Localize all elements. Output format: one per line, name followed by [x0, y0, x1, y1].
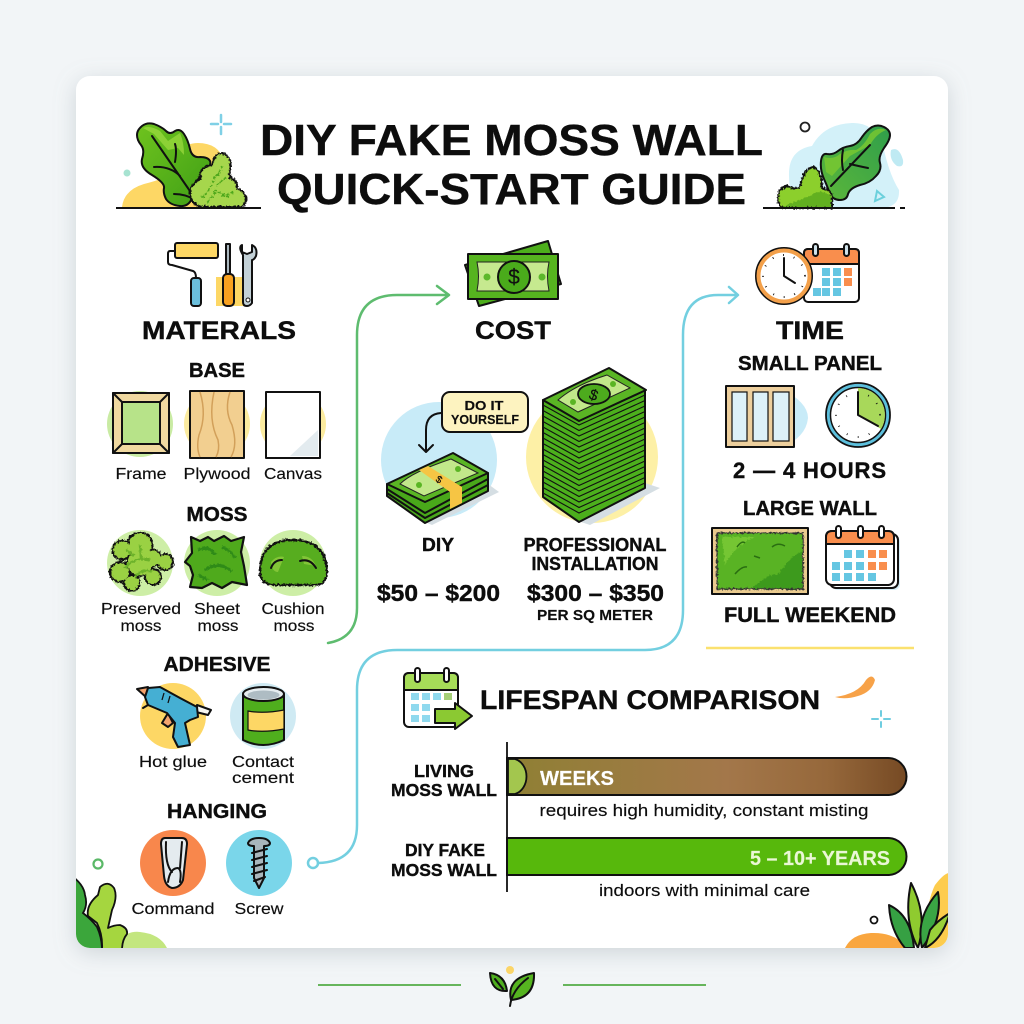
heading: time: TIME — [776, 317, 844, 345]
icon: diy money stack: $ — [434, 474, 444, 487]
subheading: hanging: HANGING — [167, 801, 267, 823]
icon: banknotes: $ — [508, 266, 520, 289]
bar: diy fake moss wall — [507, 838, 906, 875]
label: preserved moss: moss — [120, 618, 162, 635]
label: professional installation: INSTALLATION — [532, 554, 658, 574]
icon: title leaf and moss left — [116, 115, 261, 208]
label: screw: Screw — [234, 901, 284, 918]
icon: title leaf and moss right — [763, 122, 905, 208]
title: DIY FAKE MOSS WALL — [260, 116, 763, 165]
subheading: large wall: LARGE WALL — [743, 498, 877, 520]
label: diy fake moss wall — [391, 840, 497, 880]
label: cushion moss: Cushion — [262, 601, 324, 618]
infographic canvas — [68, 73, 956, 1007]
callout: do it yourself — [419, 392, 528, 452]
note: living moss care: requires high humidity, constant misting — [540, 801, 868, 820]
label: contact cement: Contact — [232, 754, 295, 771]
icon: frame — [107, 391, 173, 457]
icon: clock two to four hours — [826, 383, 890, 447]
label: professional installation — [524, 535, 667, 574]
subheading: adhesive: ADHESIVE — [164, 654, 270, 676]
label: contact cement: cement — [232, 770, 295, 787]
icon: hot glue gun — [137, 683, 211, 749]
panel: time — [706, 244, 914, 648]
subheading: moss: MOSS — [186, 504, 248, 526]
icon: professional money stack: $ — [587, 386, 601, 405]
label: cushion moss — [262, 601, 324, 635]
bar: living moss wall: WEEKS — [540, 768, 614, 790]
heading: cost: COST — [475, 317, 551, 345]
icon: contact cement can — [230, 683, 296, 749]
label: preserved moss: Preserved — [101, 601, 181, 618]
subheading: small panel: SMALL PANEL — [738, 353, 882, 375]
callout: do it yourself: YOURSELF — [451, 412, 519, 427]
value: diy cost: $50 – $200 — [377, 580, 500, 606]
icon: screw — [226, 830, 292, 896]
label: sheet moss — [194, 601, 241, 635]
icon: plywood — [184, 391, 250, 458]
label: living moss wall — [391, 761, 497, 800]
heading: materials: MATERALS — [142, 317, 296, 345]
value: professional cost — [527, 580, 664, 624]
label: frame: Frame — [116, 466, 167, 483]
label: plywood: Plywood — [184, 466, 250, 483]
subheading: base: BASE — [189, 360, 245, 382]
label: canvas: Canvas — [264, 466, 322, 483]
icon: preserved moss — [107, 530, 174, 596]
icon: banknotes — [465, 241, 561, 306]
decoration: bottom left foliage — [72, 860, 167, 950]
arrow: materials to cost — [328, 286, 449, 643]
value: professional cost: PER SQ METER — [537, 607, 653, 624]
axis — [506, 742, 508, 892]
icon: diy money stack — [381, 402, 499, 525]
value: professional cost: $300 – $350 — [527, 580, 664, 606]
icon: large calendar — [826, 526, 900, 590]
icon: cushion moss — [260, 530, 327, 596]
label: living moss wall: LIVING — [414, 761, 474, 781]
icon: clock and calendar — [756, 244, 859, 304]
arrow: hanging to time — [308, 287, 738, 868]
label: sheet moss: moss — [198, 618, 238, 635]
label: sheet moss: Sheet — [194, 601, 241, 618]
decoration: bottom right foliage — [845, 873, 950, 948]
value: small panel time: 2 — 4 HOURS — [733, 458, 886, 483]
label: diy: DIY — [422, 535, 454, 555]
footer divider with leaf — [318, 966, 706, 1006]
icon: tools — [168, 243, 256, 306]
label: living moss wall: MOSS WALL — [391, 780, 497, 800]
icon: sheet moss — [184, 530, 250, 596]
panel: materials — [101, 243, 327, 918]
label: hot glue: Hot glue — [139, 754, 207, 771]
label: cushion moss: moss — [274, 618, 314, 635]
label: professional installation: PROFESSIONAL — [524, 535, 667, 555]
icon: canvas — [260, 391, 326, 458]
label: diy fake moss wall: DIY FAKE — [405, 840, 485, 860]
label: command: Command — [132, 901, 214, 918]
callout: do it yourself: DO IT — [464, 398, 504, 413]
panel: cost — [377, 241, 667, 624]
icon: professional money stack — [526, 368, 660, 525]
icon: calendar with arrow — [404, 668, 472, 729]
title — [260, 116, 763, 214]
panel: lifespan comparison — [391, 668, 906, 900]
label: contact cement — [232, 754, 295, 787]
icon: large moss wall — [712, 528, 808, 594]
icon: small wood frame — [726, 386, 808, 448]
bar: living moss wall — [507, 758, 906, 795]
title: QUICK-START GUIDE — [277, 165, 746, 214]
value: large wall time: FULL WEEKEND — [724, 604, 896, 627]
white card — [76, 76, 948, 948]
label: diy fake moss wall: MOSS WALL — [391, 860, 497, 880]
bar: diy fake moss wall: 5 – 10+ YEARS — [750, 848, 890, 870]
note: diy moss care: indoors with minimal care — [599, 881, 810, 900]
label: preserved moss — [101, 601, 181, 635]
heading: lifespan comparison: LIFESPAN COMPARISON — [480, 685, 820, 715]
icon: command hook — [140, 830, 206, 896]
